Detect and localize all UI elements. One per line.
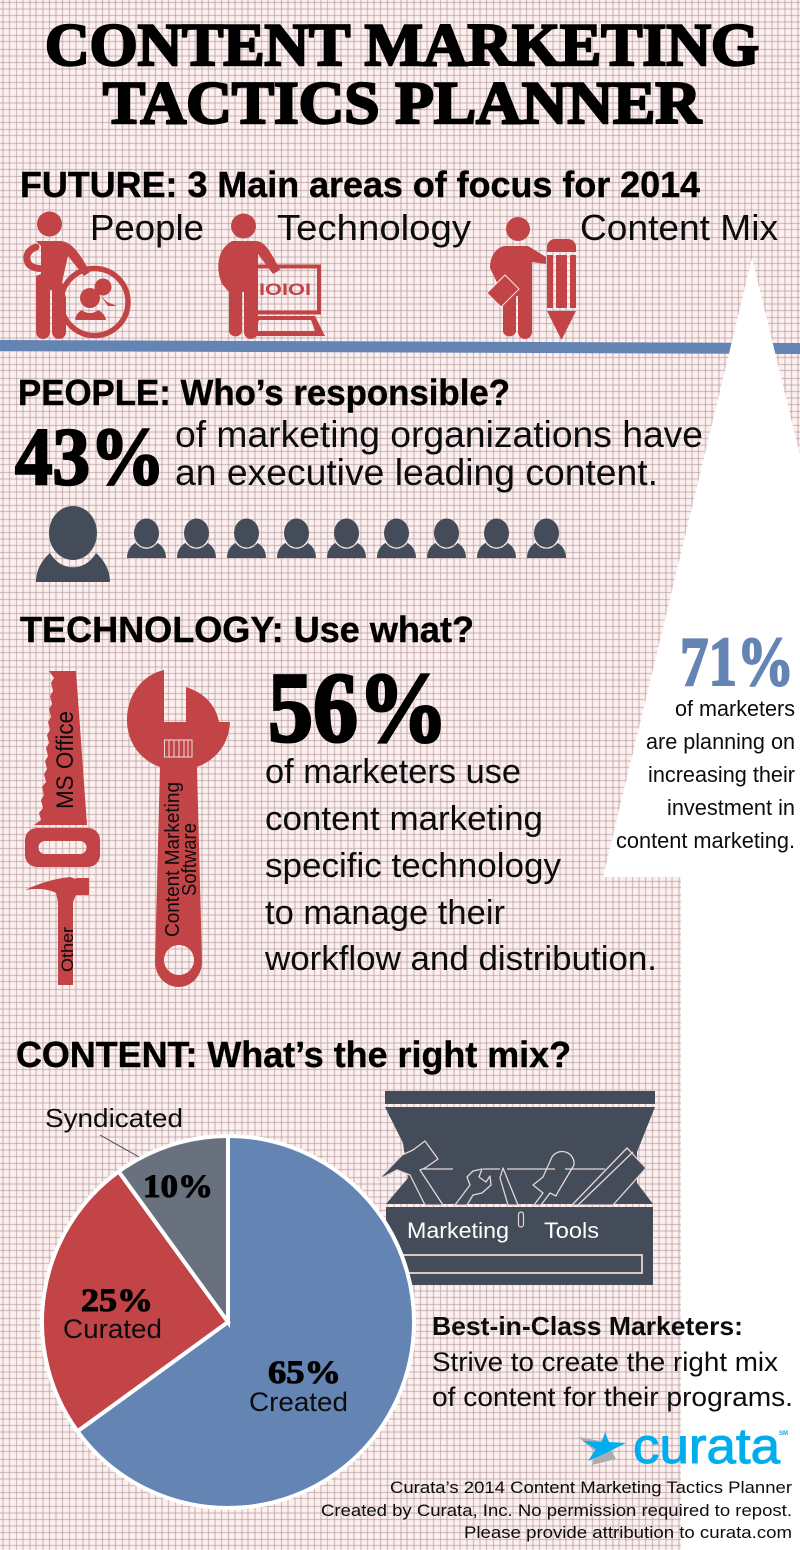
title: CONTENT MARKETING <box>45 12 759 78</box>
label: people: People <box>90 207 204 248</box>
value: 65%: 65% <box>268 1355 341 1391</box>
panel: three focus areas <box>27 207 778 340</box>
pie chart <box>42 1136 414 1508</box>
text block: technology stat: specific technology <box>265 847 561 885</box>
pie labels <box>45 1103 348 1417</box>
text block: best-in-class marketers: Strive to create the right mix <box>432 1347 779 1377</box>
icon: wrench labelled Content Marketing Software <box>127 670 230 987</box>
text block: technology stat: to manage their <box>265 894 505 932</box>
icon: wrench labelled Content Marketing Software: Content Marketing <box>162 782 184 937</box>
icon: person with laptop: IOIOI <box>259 280 311 299</box>
tool: wrench <box>455 1169 491 1205</box>
logo: curata: curata <box>633 1418 780 1474</box>
text block: best-in-class marketers: Best-in-Class Marketers: <box>432 1311 743 1341</box>
tool: handsaw <box>572 1148 646 1205</box>
heading: future: FUTURE: 3 Main areas of focus for 2014 <box>20 164 700 205</box>
logo: curata: SM <box>779 1431 788 1437</box>
text block: best-in-class marketers <box>432 1311 793 1412</box>
title: TACTICS PLANNER <box>103 70 702 136</box>
callout: 71% of marketers: content marketing. <box>616 828 795 853</box>
text block: technology stat: content marketing <box>265 800 543 838</box>
label: content mix: Content Mix <box>580 207 778 248</box>
icon: toolbox <box>378 1091 655 1285</box>
text block: executive stat: of marketing organizations have <box>175 414 703 455</box>
text block: technology stat <box>264 753 657 978</box>
callout: 71% of marketers: are planning on <box>646 729 795 754</box>
label: curated: Curated <box>63 1314 162 1344</box>
text block: technology stat: workflow and distribution. <box>264 940 657 978</box>
value: 10%: 10% <box>143 1169 213 1205</box>
icon: large executive person <box>36 506 110 582</box>
footer credits: Created by Curata, Inc. No permission required to repost. <box>321 1501 792 1520</box>
callout: 71% of marketers: increasing their <box>648 762 795 787</box>
slice: curated 25% <box>42 1172 228 1431</box>
icon row: ten people <box>36 506 566 582</box>
slice: created 65% <box>78 1136 414 1508</box>
logo: curata <box>578 1418 788 1474</box>
icon: person with laptop <box>218 214 325 339</box>
heading: people: PEOPLE: Who’s responsible? <box>18 372 510 413</box>
icon: saw labelled MS Office: MS Office <box>52 711 79 809</box>
callout: 71% of marketers <box>616 624 795 853</box>
stat: 43%: 43% <box>15 411 165 502</box>
tool: hammer <box>378 1141 443 1205</box>
white panel shape behind 71% callout <box>603 258 800 1550</box>
icon: hammer labelled Other: Other <box>58 927 77 972</box>
text block: technology stat: of marketers use <box>265 753 521 791</box>
footer credits <box>321 1478 792 1542</box>
heading: content: CONTENT: What’s the right mix? <box>16 1034 571 1075</box>
value: 25%: 25% <box>81 1283 153 1319</box>
label: created: Created <box>249 1387 348 1417</box>
label: technology: Technology <box>277 207 471 248</box>
footer credits: Please provide attribution to curata.com <box>464 1523 792 1542</box>
icon: person with pencil <box>487 217 576 340</box>
toolbox label: Marketing <box>407 1218 509 1243</box>
toolbox latch <box>518 1212 524 1227</box>
text block: executive stat: an executive leading content. <box>175 452 658 493</box>
toolbox label: Tools <box>544 1218 599 1243</box>
text block: executive stat <box>175 414 703 493</box>
icon: saw labelled MS Office <box>25 671 100 867</box>
label: syndicated: Syndicated <box>45 1103 183 1133</box>
icon: person with people circle <box>27 212 128 339</box>
text block: best-in-class marketers: of content for their programs. <box>432 1382 793 1412</box>
tool: screwdriver <box>500 1168 518 1205</box>
heading: technology: TECHNOLOGY: Use what? <box>20 609 474 650</box>
footer credits: Curata’s 2014 Content Marketing Tactics Planner <box>390 1478 792 1497</box>
icon: wrench labelled Content Marketing Software: Software <box>179 823 201 896</box>
callout: 71% of marketers: investment in <box>667 795 795 820</box>
slice: syndicated 10% <box>119 1136 228 1322</box>
stat: 56%: 56% <box>268 652 448 763</box>
icon: hammer labelled Other <box>25 877 89 985</box>
tool: large screwdriver <box>533 1151 574 1205</box>
blue divider line <box>0 340 800 354</box>
callout: 71% of marketers: of marketers <box>675 696 795 721</box>
title <box>45 12 759 136</box>
